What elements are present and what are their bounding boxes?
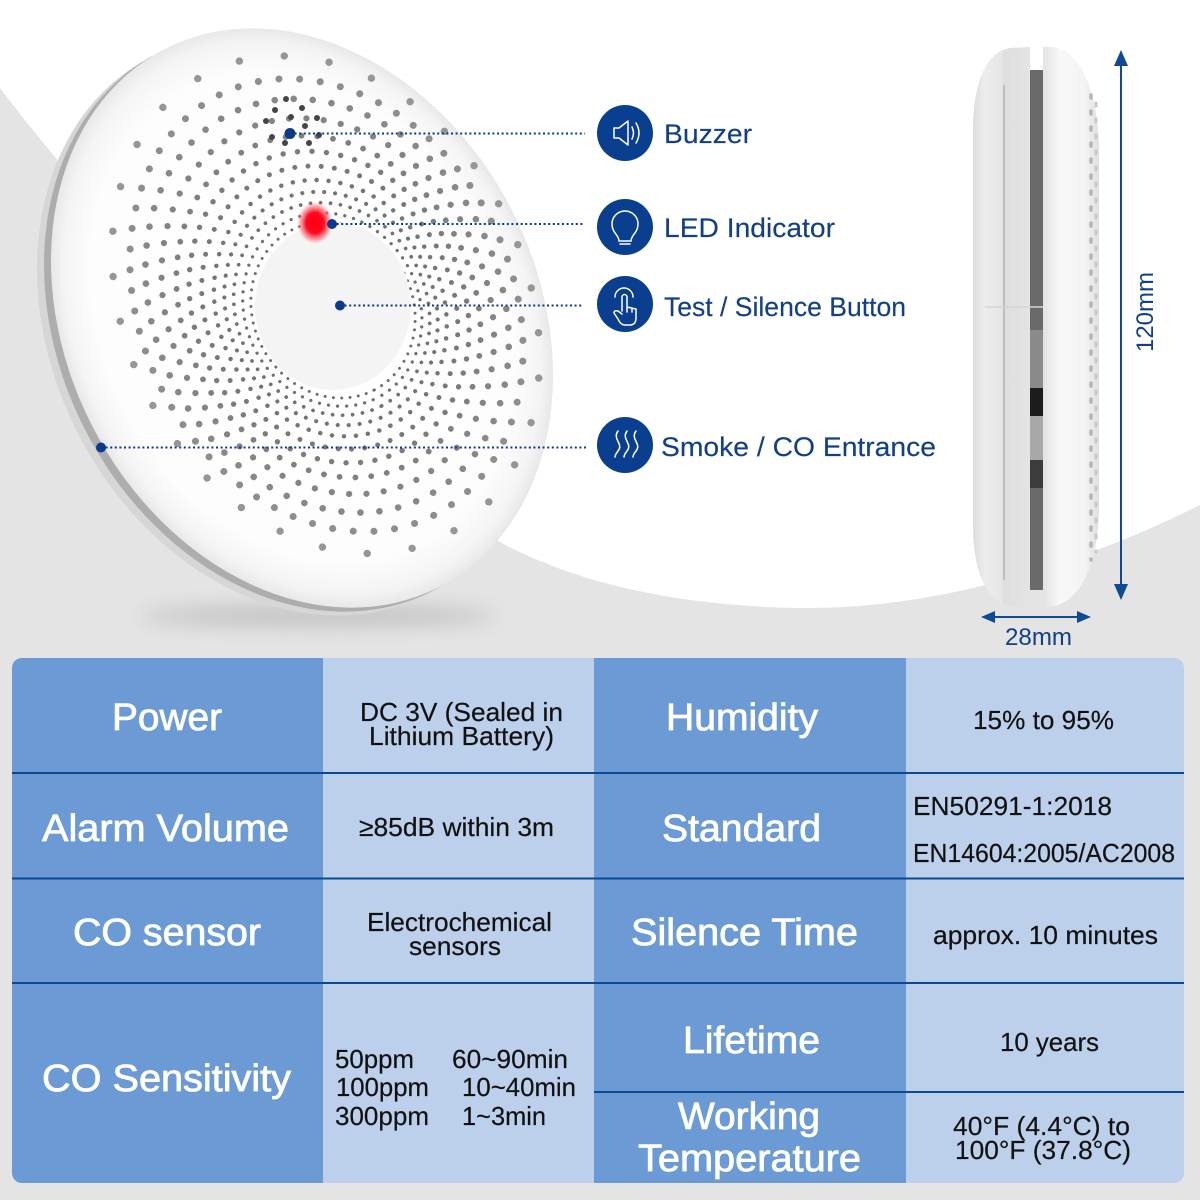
icon: light bulb xyxy=(597,199,653,255)
row: CO sensitivity: CO Sensitivity xyxy=(42,1058,291,1100)
row: silence time: approx. 10 minutes xyxy=(933,920,1158,950)
row: humidity xyxy=(666,697,1114,739)
row: working temperature: Temperature xyxy=(638,1138,861,1180)
icon: smoke waves xyxy=(597,417,653,473)
icon: pressing hand xyxy=(597,276,653,332)
label: LED Indicator: LED Indicator xyxy=(664,213,835,243)
row: power: Power xyxy=(112,697,222,739)
table backgrounds xyxy=(12,658,1184,1183)
label: Buzzer: Buzzer xyxy=(664,119,752,149)
row: CO sensor: sensors xyxy=(409,931,501,961)
label: Test / Silence Button: Test / Silence Button xyxy=(664,292,906,322)
row: standard: Standard xyxy=(662,808,821,850)
label: Smoke / CO Entrance: Smoke / CO Entrance xyxy=(661,432,936,462)
row: CO sensitivity: 1~3min xyxy=(462,1101,546,1131)
row: power: Lithium Battery) xyxy=(369,721,554,751)
dimension label: 120mm: 120mm xyxy=(1132,272,1159,352)
row: CO sensitivity xyxy=(42,1044,576,1131)
product: detector front view xyxy=(0,0,649,702)
row: power xyxy=(112,697,563,751)
leader line: button xyxy=(335,300,583,310)
row: lifetime xyxy=(683,1020,1099,1062)
row: CO sensor: CO sensor xyxy=(73,912,261,954)
row: lifetime: Lifetime xyxy=(683,1020,820,1062)
row: CO sensor xyxy=(73,907,552,961)
dimension: width arrow xyxy=(981,611,1091,623)
row: standard: EN14604:2005/AC2008 xyxy=(913,838,1175,868)
row: CO sensitivity: 50ppm xyxy=(335,1044,414,1074)
row: humidity: Humidity xyxy=(666,697,818,739)
row: CO sensitivity: 100ppm xyxy=(336,1072,429,1102)
row: CO sensitivity: 300ppm xyxy=(335,1101,429,1131)
row: CO sensitivity: 10~40min xyxy=(462,1072,576,1102)
dimension: height arrow xyxy=(1114,50,1128,600)
row: alarm volume: Alarm Volume xyxy=(42,808,289,850)
leader line: buzzer xyxy=(284,128,585,139)
leader line: LED xyxy=(327,219,585,229)
row: power: DC 3V (Sealed in xyxy=(360,697,563,727)
detector vent holes xyxy=(30,0,622,627)
row: silence time xyxy=(631,912,1158,954)
icon: speaker xyxy=(597,105,653,161)
row: lifetime: 10 years xyxy=(1000,1027,1099,1057)
row: alarm volume xyxy=(42,808,554,850)
test button area xyxy=(255,222,411,390)
row: standard: EN50291-1:2018 xyxy=(913,791,1112,821)
leader line: entrance xyxy=(96,442,587,452)
specifications table xyxy=(12,658,1184,1183)
dimension label: 28mm: 28mm xyxy=(1005,624,1072,651)
row: silence time: Silence Time xyxy=(631,912,858,954)
row: working temperature: 40°F (4.4°C) to xyxy=(953,1111,1130,1141)
row: working temperature: 100°F (37.8°C) xyxy=(955,1135,1131,1165)
row: working temperature: Working xyxy=(678,1096,820,1138)
row: CO sensor: Electrochemical xyxy=(367,907,552,937)
row: standard xyxy=(662,791,1175,868)
row: humidity: 15% to 95% xyxy=(973,705,1114,735)
row: alarm volume: ≥85dB within 3m xyxy=(359,812,554,842)
LED glow xyxy=(297,202,333,244)
row: working temperature xyxy=(638,1096,1131,1180)
row: CO sensitivity: 60~90min xyxy=(452,1044,568,1074)
buzzer dark holes xyxy=(263,96,322,146)
product: detector side view xyxy=(973,47,1099,608)
